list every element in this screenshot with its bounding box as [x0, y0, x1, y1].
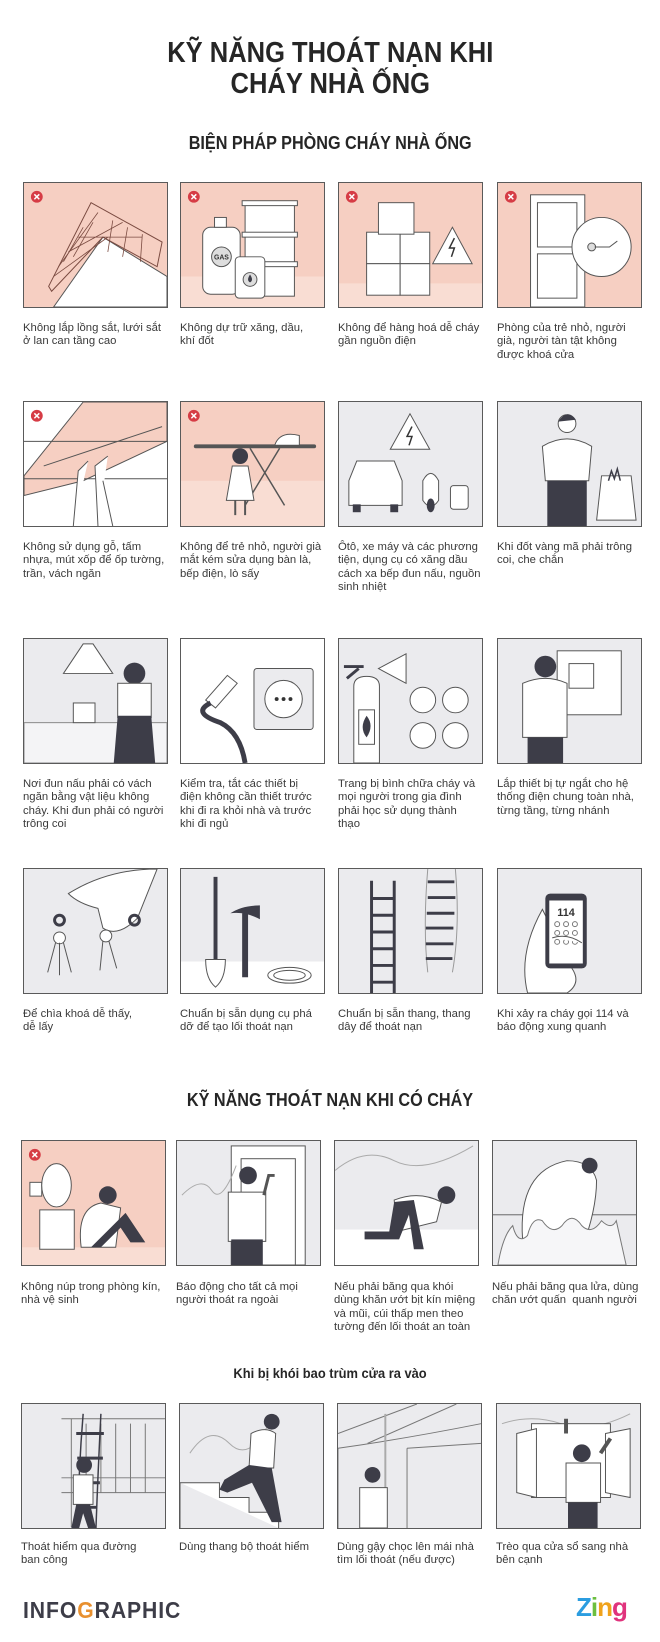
caption — [180, 322, 303, 347]
caption: Phòng của trẻ nhỏ, người — [497, 322, 626, 334]
caption: trần, vách ngăn — [23, 568, 101, 580]
panel: circuit breaker — [497, 638, 642, 764]
caption: bếp điện, lò sấy — [180, 568, 259, 580]
caption: phải học sử dụng thành — [338, 805, 457, 817]
caption — [180, 1008, 312, 1033]
icon: forbidden — [31, 191, 43, 203]
caption: Nếu phải băng qua khói — [334, 1281, 453, 1293]
caption: Ôtô, xe máy và các phương — [338, 541, 478, 553]
title — [167, 36, 493, 100]
panel: gas storage: GAS — [214, 255, 229, 262]
caption: Thoát hiểm qua đường — [21, 1541, 136, 1553]
caption: Dùng thang bộ thoát hiểm — [179, 1541, 309, 1553]
caption: sinh nhiệt — [338, 581, 386, 593]
caption: Lắp thiết bị tự ngắt cho hệ — [497, 778, 628, 790]
caption — [338, 778, 476, 830]
panel: electrical plug — [180, 638, 325, 764]
caption: mọi người trong gia đình — [338, 791, 462, 803]
caption: Khi xảy ra cháy gọi 114 và — [497, 1008, 629, 1020]
caption: Không sử dụng gỗ, tấm — [23, 541, 141, 553]
panel: keys — [23, 868, 168, 994]
caption: coi, che chắn — [497, 554, 564, 566]
panel: climb through window — [496, 1403, 641, 1529]
caption: nhựa, mút xốp để ốp tường, — [23, 554, 164, 566]
caption: Để chìa khoá dễ thấy, — [23, 1008, 132, 1020]
caption: Kiểm tra, tắt các thiết bị — [180, 778, 298, 790]
caption: Không lắp lồng sắt, lưới sắt — [23, 322, 161, 334]
caption — [23, 321, 161, 347]
caption: trông coi — [23, 818, 66, 830]
caption: bên cạnh — [496, 1554, 542, 1566]
caption: tường đến lối thoát an toàn — [334, 1321, 470, 1333]
caption: tiện, dụng cụ có xăng dầu — [338, 554, 467, 566]
caption: khi đi ra khỏi nhà và trước — [180, 805, 311, 817]
caption: Trang bị bình chữa cháy và — [338, 778, 475, 790]
caption — [497, 777, 634, 817]
caption — [23, 1007, 132, 1033]
caption: thống điện chung toàn nhà, — [497, 791, 634, 803]
panel: through fire with blanket — [492, 1140, 637, 1266]
title: KỸ NĂNG THOÁT NẠN KHI — [167, 37, 493, 69]
caption: Không để hàng hoá dễ cháy — [338, 322, 479, 334]
icon: forbidden — [346, 191, 358, 203]
subheading: smoke at the door: Khi bị khói bao trùm cửa ra vào — [233, 1365, 427, 1381]
icon: forbidden — [188, 191, 200, 203]
panel: burning votive paper — [497, 401, 642, 527]
caption: Nơi đun nấu phải có vách — [23, 778, 152, 790]
caption — [23, 778, 163, 830]
caption: Khi đốt vàng mã phải trông — [497, 541, 632, 553]
caption: tìm lối thoát (nếu được) — [337, 1554, 455, 1566]
panel: phone 114 — [497, 868, 642, 994]
panel: stairs — [179, 1403, 324, 1529]
panel: balcony escape — [21, 1403, 166, 1529]
icon: forbidden — [31, 410, 43, 422]
panel: alarm — [176, 1140, 321, 1266]
caption: Báo động cho tất cả mọi — [176, 1281, 298, 1293]
caption: điện không cần thiết trước — [180, 791, 312, 803]
panel: vehicles away from heat — [338, 401, 483, 527]
caption — [492, 1281, 638, 1306]
caption: Chuẩn bị sẵn thang, thang — [338, 1008, 471, 1020]
panel: fire extinguisher — [338, 638, 483, 764]
panel: tools — [180, 868, 325, 994]
icon: forbidden — [188, 410, 200, 422]
caption: được khoá cửa — [497, 349, 574, 361]
caption — [23, 540, 164, 580]
caption — [497, 1008, 629, 1033]
panel: phone 114: 114 — [557, 907, 575, 919]
caption: thạo — [338, 818, 360, 830]
caption: từng tầng, từng nhánh — [497, 805, 610, 817]
panel: ladders — [338, 868, 483, 994]
caption: Không núp trong phòng kín, — [21, 1281, 160, 1293]
caption: ở lan can tầng cao — [23, 335, 116, 347]
heading: prevention: BIỆN PHÁP PHÒNG CHÁY NHÀ ỐNG — [189, 133, 471, 153]
heading: escape skills: KỸ NĂNG THOÁT NẠN KHI CÓ CHÁY — [187, 1090, 473, 1110]
caption — [180, 541, 322, 580]
caption — [497, 541, 632, 566]
panel: hiding in toilet — [21, 1140, 166, 1266]
caption: dễ lấy — [23, 1021, 53, 1033]
panel: kitchen — [23, 638, 168, 764]
caption — [176, 1281, 298, 1306]
caption: cách xa bếp đun nấu, nguồn — [338, 568, 481, 580]
caption: già, người tàn tật không — [497, 335, 617, 347]
caption: ngăn bằng vật liệu không — [23, 791, 149, 803]
caption: khí đốt — [180, 335, 214, 347]
caption: người thoát ra ngoài — [176, 1294, 278, 1306]
caption: nhà vệ sinh — [21, 1294, 79, 1306]
caption — [338, 321, 480, 347]
caption: chăn ướt quấn quanh người — [492, 1294, 637, 1306]
panel: poke roof with stick — [337, 1403, 482, 1529]
caption: và mũi, cúi thấp men theo — [334, 1308, 463, 1320]
caption — [338, 1008, 471, 1033]
panel: gas storage — [180, 182, 325, 308]
caption: Không để trẻ nhỏ, người già — [180, 541, 321, 553]
panel: goods near electricity — [338, 182, 483, 308]
caption: dùng khăn ướt bịt kín miệng — [334, 1294, 475, 1306]
caption — [21, 1281, 160, 1306]
caption — [334, 1281, 475, 1333]
caption — [21, 1541, 136, 1566]
panel: iron cage balcony — [23, 182, 168, 308]
caption: cháy. Khi đun phải có người — [23, 805, 163, 817]
caption — [496, 1541, 628, 1566]
caption — [338, 540, 481, 593]
caption — [337, 1541, 474, 1566]
caption: Trèo qua cửa sổ sang nhà — [496, 1541, 628, 1553]
caption: Dùng gậy chọc lên mái nhà — [337, 1541, 474, 1553]
caption: báo động xung quanh — [497, 1021, 606, 1033]
caption: ban công — [21, 1554, 67, 1566]
title: CHÁY NHÀ ỐNG — [230, 68, 430, 100]
caption: khi đi ngủ — [180, 818, 228, 830]
panel: crawling through smoke — [334, 1140, 479, 1266]
caption: dỡ để tạo lối thoát nạn — [180, 1021, 293, 1033]
caption: Không dự trữ xăng, dầu, — [180, 322, 303, 334]
caption: gần nguồn điện — [338, 335, 416, 347]
caption: Chuẩn bị sẵn dụng cụ phá — [180, 1008, 312, 1020]
caption: Nếu phải băng qua lửa, dùng — [492, 1281, 638, 1293]
footer: INFOGRAPHIC logo: INFOGRAPHIC — [23, 1597, 181, 1623]
panel: locked door — [497, 182, 642, 308]
icon: forbidden — [505, 191, 517, 203]
caption: dây để thoát nạn — [338, 1021, 422, 1033]
caption — [180, 777, 312, 830]
footer: Zing logo: Zing — [576, 1592, 627, 1622]
panel: child and iron — [180, 401, 325, 527]
panel: wood panels — [23, 401, 168, 527]
caption: mắt kém sửa dụng bàn là, — [180, 554, 311, 566]
caption — [497, 322, 626, 361]
icon: forbidden — [29, 1149, 41, 1161]
